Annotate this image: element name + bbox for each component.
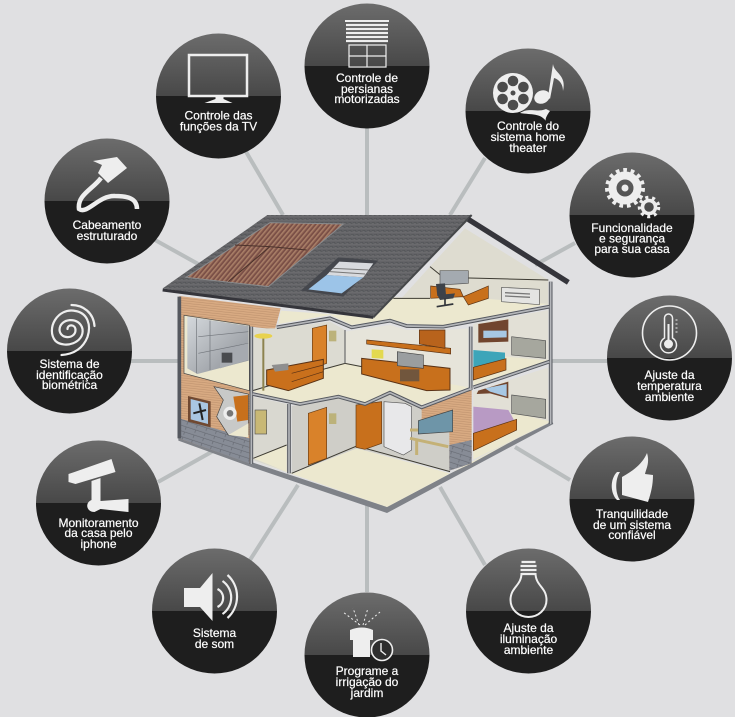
label: gears: e segurança xyxy=(599,232,665,246)
icon: thermometer xyxy=(642,306,696,360)
badge: TV xyxy=(156,34,281,158)
icon: TV xyxy=(189,55,247,103)
label: gears: Funcionalidade xyxy=(591,221,673,235)
badge: sound xyxy=(152,548,277,674)
lower bedroom xyxy=(473,367,551,460)
label: blinds: persianas xyxy=(341,82,393,96)
house illustration xyxy=(163,215,568,513)
badge: irrigation xyxy=(304,592,430,717)
label: thumbs up: Tranquilidade xyxy=(596,507,668,521)
badge: thumbs up xyxy=(570,436,694,562)
label: home theater: theater xyxy=(509,141,547,155)
desk xyxy=(431,286,488,305)
icon: fingerprint spiral xyxy=(52,305,94,355)
badge: home theater xyxy=(466,48,590,174)
label: biometric: identificação xyxy=(36,368,103,382)
label: temperature: Ajuste da xyxy=(644,368,695,382)
label: temperature: temperatura xyxy=(637,379,702,393)
roof xyxy=(163,215,568,317)
house: ground floor rooms xyxy=(253,393,450,473)
skylight xyxy=(301,257,378,297)
cabinet xyxy=(356,402,382,449)
label: sound: de som xyxy=(195,637,234,651)
brick column xyxy=(418,390,472,471)
attic xyxy=(278,228,548,326)
icon: film reel and note xyxy=(493,64,564,121)
label: temperature: ambiente xyxy=(645,390,695,404)
sofa xyxy=(267,359,323,391)
icon: security camera xyxy=(68,459,128,512)
floor lamp xyxy=(260,338,266,391)
AC unit xyxy=(502,287,539,305)
house: brick left wall xyxy=(179,296,281,463)
icon: speaker xyxy=(184,573,237,621)
label: irrigation: jardim xyxy=(350,686,383,700)
icon: sprinkler and clock xyxy=(343,608,392,660)
boiler xyxy=(384,402,412,455)
label: home theater: sistema home xyxy=(491,130,566,144)
icon: light bulb xyxy=(510,562,546,617)
chair xyxy=(436,283,455,307)
label: light bulb: Ajuste da xyxy=(503,621,554,635)
label: camera: iphone xyxy=(80,537,117,551)
icon: gears xyxy=(608,170,658,216)
badge: biometric xyxy=(7,288,132,414)
badge: cable xyxy=(44,138,170,264)
wall edges xyxy=(179,282,551,473)
connector lines xyxy=(130,127,608,592)
label: biometric: Sistema de xyxy=(39,357,100,371)
label: sound: Sistema xyxy=(193,626,236,640)
badge: temperature xyxy=(607,296,732,420)
label: home theater: Controle do xyxy=(497,119,559,133)
door: ground floor xyxy=(308,407,327,465)
label: blinds: Controle de xyxy=(336,71,398,85)
label: camera: Monitoramento xyxy=(58,516,139,530)
kitchen xyxy=(184,315,249,391)
label: thumbs up: confiável xyxy=(608,528,656,542)
TV unit xyxy=(362,358,450,391)
badge: light bulb xyxy=(466,548,591,674)
label: gears: para sua casa xyxy=(594,242,670,256)
label: cable: estruturado xyxy=(77,229,138,243)
badge: camera xyxy=(36,440,161,566)
label: cable: Cabeamento xyxy=(73,218,142,232)
outside window xyxy=(188,396,211,427)
icon: cable xyxy=(79,157,137,210)
upper bedroom xyxy=(473,310,548,387)
living room xyxy=(253,322,468,405)
label: blinds: motorizadas xyxy=(334,92,400,106)
label: camera: da casa pelo xyxy=(64,526,133,540)
laundry xyxy=(214,387,248,437)
badge: blinds xyxy=(304,4,430,128)
shelf xyxy=(367,340,451,354)
label: thumbs up: de um sistema xyxy=(593,518,671,532)
label: irrigation: Programe a xyxy=(336,664,399,678)
icon: thumbs up xyxy=(612,453,653,502)
label: light bulb: ambiente xyxy=(504,643,554,657)
icon: blinds xyxy=(345,21,389,67)
badge: gears xyxy=(570,152,694,278)
label: TV: Controle das xyxy=(184,108,253,122)
house: ground slab xyxy=(178,420,553,513)
label: irrigation: irrigação do xyxy=(336,675,399,689)
label: light bulb: iluminação xyxy=(500,632,558,646)
label: TV: funções da TV xyxy=(180,120,257,134)
label: biometric: biométrica xyxy=(42,378,98,392)
solar panel xyxy=(186,223,343,287)
